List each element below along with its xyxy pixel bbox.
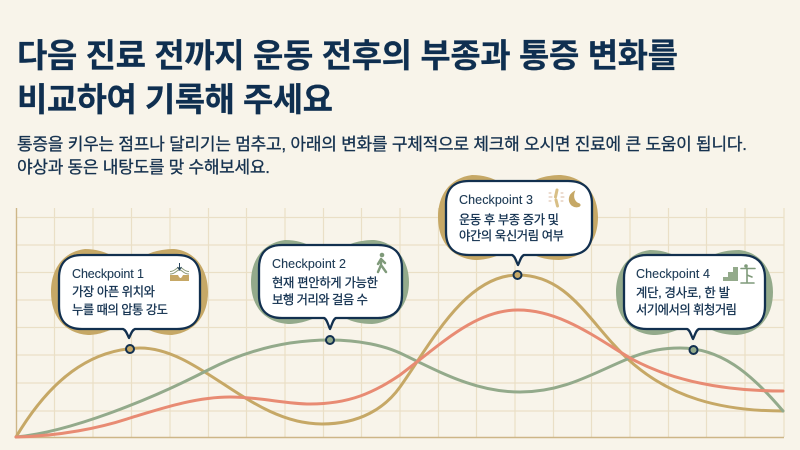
curve: green (16, 340, 783, 437)
icon: walking person (378, 253, 386, 272)
icon: stairs (723, 267, 738, 281)
heading 2: Checkpoint 2 (272, 257, 346, 271)
body 4 (636, 286, 737, 317)
body 1: 누를 때의 압통 강도 (72, 303, 168, 317)
heading 1: Checkpoint 1 (72, 267, 144, 281)
body 4: 계단, 경사로, 한 발 (636, 286, 730, 300)
body 1 (72, 285, 168, 317)
body 1: 가장 아픈 위치와 (72, 285, 155, 299)
backdrop blob 4 (616, 250, 773, 335)
callout: checkpoint 3 (438, 175, 598, 279)
title (17, 37, 678, 118)
intro text: 통증을 키우는 점프나 달리기는 멈추고, 아래의 변화를 구체적으로 체크해 오시면 진료에 큰 도움이 됩니다. (17, 135, 747, 154)
body 3 (459, 213, 564, 243)
backdrop blob 1 (51, 249, 208, 335)
bubble 4 (624, 255, 765, 339)
line chart (16, 208, 784, 438)
callout: checkpoint 4 (616, 250, 773, 354)
marker 1 (126, 345, 134, 353)
intro text: 야상과 동은 내탕도를 맞 수해보세요. (17, 158, 270, 177)
heading 4: Checkpoint 4 (636, 267, 710, 281)
marker 3 (514, 271, 522, 279)
backdrop blob 2 (251, 240, 409, 324)
icon: one-leg balance (741, 264, 755, 283)
body 4: 서기에서의 휘청거림 (636, 303, 737, 317)
marker 4 (690, 346, 698, 354)
body 2: 보행 거리와 걸음 수 (272, 292, 368, 307)
curve: gold (16, 275, 783, 437)
marker 2 (326, 336, 334, 344)
heading 3: Checkpoint 3 (459, 193, 533, 207)
icon: knee joint (549, 190, 564, 206)
bubble 2 (259, 245, 402, 329)
backdrop blob 3 (438, 175, 598, 260)
body 3: 운동 후 부종 증가 및 (459, 213, 559, 227)
title: 비교하여 기록해 주세요 (17, 81, 333, 118)
body 3: 야간의 욱신거림 여부 (459, 229, 564, 243)
callout: checkpoint 1 (51, 249, 208, 353)
intro text (17, 135, 747, 177)
bubble 1 (59, 255, 200, 338)
bubble 3 (446, 181, 592, 265)
body 2: 현재 편안하게 가능한 (272, 276, 378, 290)
title: 다음 진료 전까지 운동 전후의 부종과 통증 변화를 (17, 37, 678, 74)
body 2 (272, 276, 378, 307)
curve: red (16, 310, 783, 437)
icon: pressure on skin (170, 263, 189, 281)
icon: moon (570, 192, 580, 207)
callout: checkpoint 2 (251, 240, 409, 344)
